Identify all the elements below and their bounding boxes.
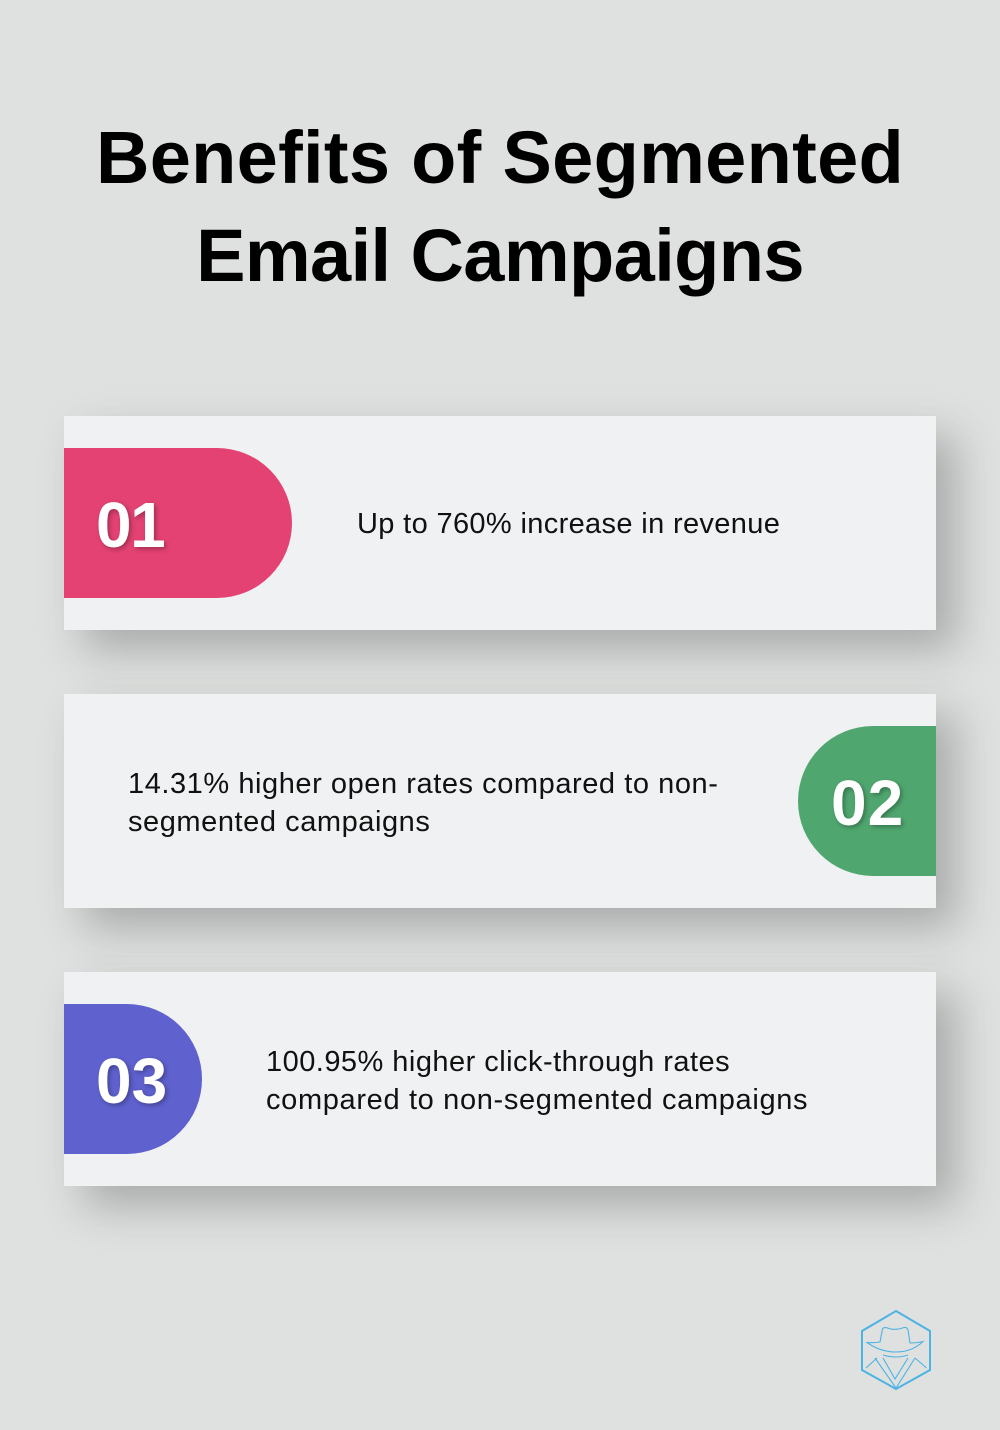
text: benefit 03: compared to non-segmented campaigns — [266, 1084, 808, 1116]
title: Benefits of Segmented — [96, 116, 904, 199]
badge: 02 — [798, 726, 936, 876]
badge: 01: 01 — [96, 489, 164, 561]
text: benefit 02: segmented campaigns — [128, 806, 430, 838]
badge: 03: 03 — [96, 1045, 167, 1117]
icon: logo hexagon with hat — [861, 1310, 931, 1390]
title — [96, 116, 904, 297]
panel: benefit 02 — [64, 694, 936, 908]
badge: 03 — [64, 1004, 202, 1154]
text: benefit 03 — [266, 1046, 808, 1116]
badge: 01 — [64, 448, 292, 598]
text: benefit 01: Up to 760% increase in revenue — [357, 508, 780, 540]
text: benefit 02: 14.31% higher open rates compared to non- — [128, 768, 718, 800]
text: benefit 03: 100.95% higher click-through rates — [266, 1046, 730, 1078]
badge: 02: 02 — [831, 767, 904, 839]
panel: benefit 01 — [64, 416, 936, 630]
panel: benefit 03 — [64, 972, 936, 1186]
text: benefit 02 — [128, 768, 718, 838]
title: Email Campaigns — [196, 214, 804, 297]
